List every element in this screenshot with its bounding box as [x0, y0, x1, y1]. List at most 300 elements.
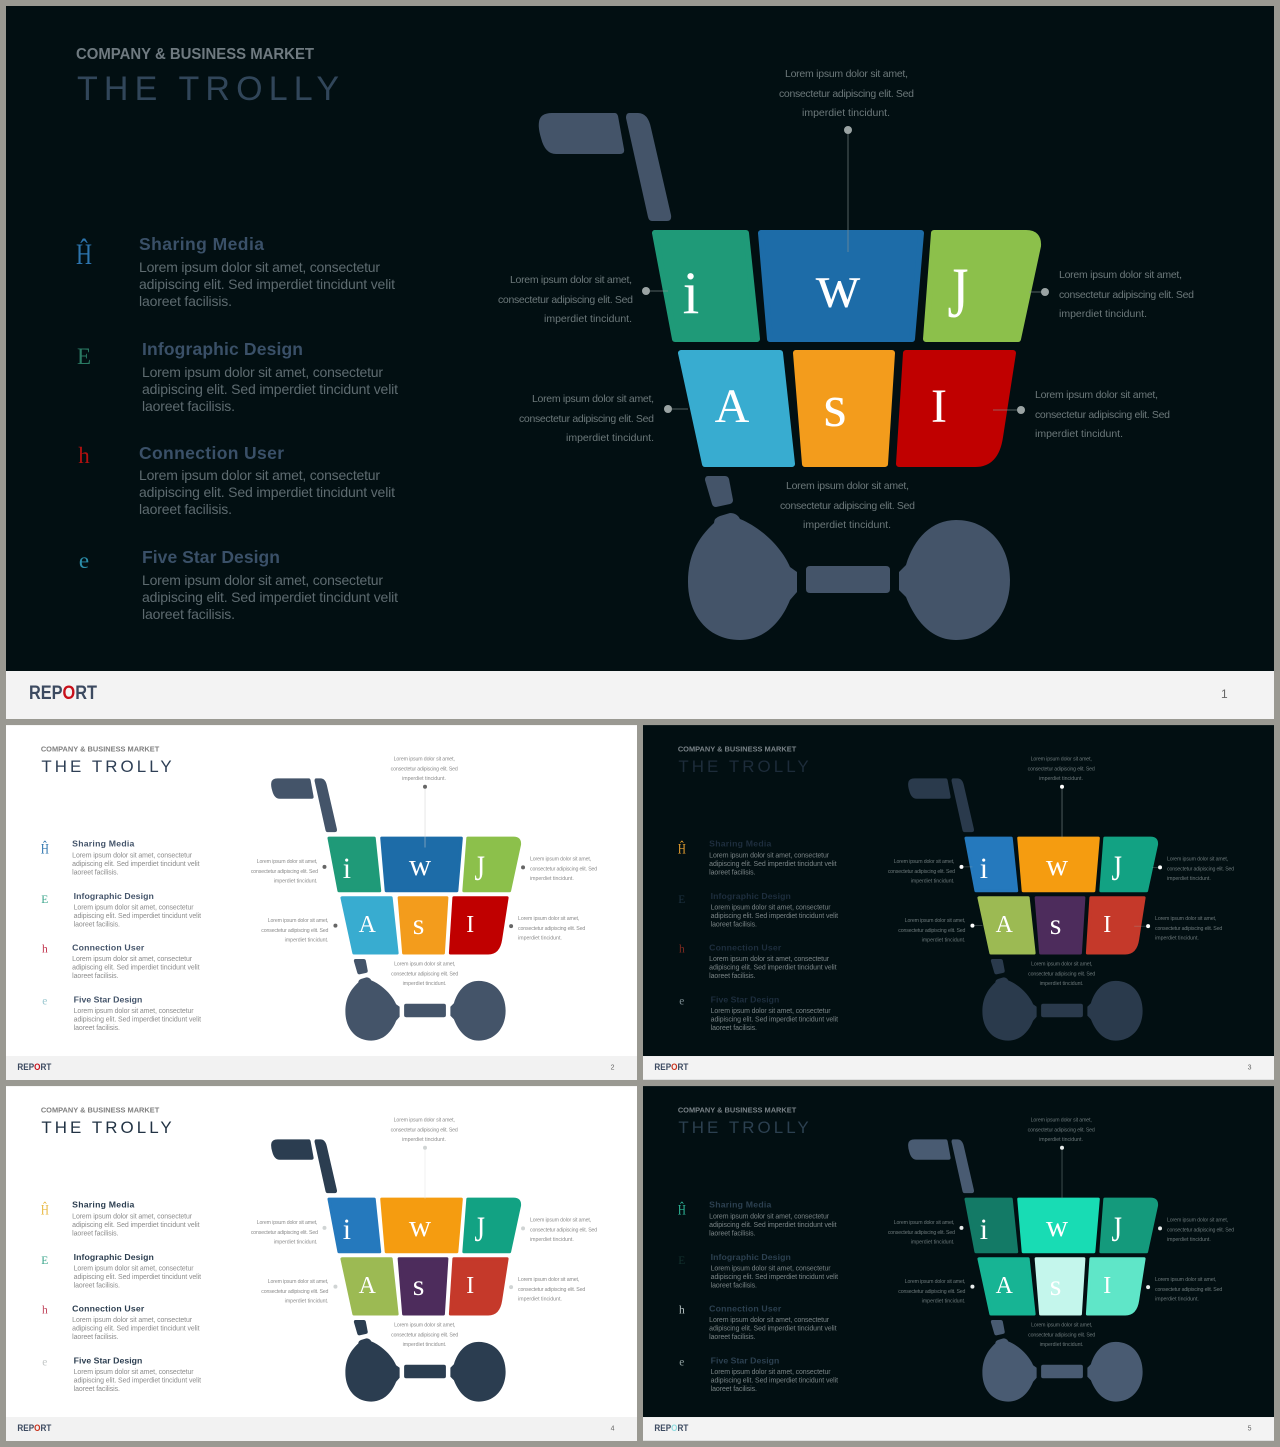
callout left lower: Lorem ipsum dolor sit amet, [905, 918, 965, 924]
callout left upper: imperdiet tincidunt. [274, 878, 318, 884]
callout right upper: Lorem ipsum dolor sit amet, [530, 856, 591, 862]
list item: Infographic Design [678, 891, 838, 929]
list item: Five Star Design [42, 1355, 201, 1393]
callout right lower: consectetur adipiscing elit. Sed [1035, 409, 1170, 421]
list item: Sharing Media: Lorem ipsum dolor sit amet, consectetur [72, 1213, 193, 1220]
callout right lower: Lorem ipsum dolor sit amet, [518, 916, 579, 922]
list item: Connection User: laoreet facilisis. [709, 1334, 756, 1341]
block i: i [343, 852, 351, 885]
callout left upper [888, 1220, 963, 1245]
block s [1036, 898, 1084, 953]
list item: Infographic Design: Infographic Design [74, 891, 154, 901]
list item: Connection User: Connection User [72, 943, 145, 953]
list item: Sharing Media: adipiscing elit. Sed imperdiet tincidunt velit [72, 1222, 200, 1229]
list item: Connection User: Lorem ipsum dolor sit amet, consectetur [139, 467, 380, 483]
list item: Connection User: adipiscing elit. Sed imperdiet tincidunt velit [139, 484, 395, 500]
callout top [1028, 756, 1095, 838]
callout left lower: imperdiet tincidunt. [922, 938, 965, 944]
callout right upper [1158, 1217, 1234, 1243]
block A [342, 1259, 397, 1314]
block w [761, 233, 921, 339]
list item: Sharing Media: adipiscing elit. Sed imperdiet tincidunt velit [139, 276, 395, 292]
block w [382, 1199, 461, 1252]
heading: slide 1 title [76, 46, 339, 108]
list item: Connection User: Lorem ipsum dolor sit amet, consectetur [72, 1317, 193, 1324]
list item: Connection User: laoreet facilisis. [72, 973, 119, 980]
block s [796, 353, 892, 464]
block J [1101, 1199, 1157, 1252]
callout right lower [509, 1277, 585, 1303]
list item: Connection User: Connection User [709, 943, 782, 953]
footer bar: 3 [1248, 1064, 1252, 1071]
heading: slide 1 title: THE TROLLY [77, 70, 339, 108]
list item: Infographic Design [678, 1252, 838, 1290]
list item: Infographic Design: E [678, 894, 685, 906]
block i: i [343, 1213, 351, 1246]
list item: Sharing Media: laoreet facilisis. [72, 1230, 119, 1237]
footer bar: 1 [1221, 687, 1228, 701]
list item: Five Star Design: Lorem ipsum dolor sit amet, consectetur [74, 1369, 194, 1376]
list item: Five Star Design: e [679, 1357, 684, 1369]
callout left lower [898, 1279, 974, 1305]
list item: Sharing Media: adipiscing elit. Sed imperdiet tincidunt velit [72, 861, 200, 868]
list item: Infographic Design: adipiscing elit. Sed imperdiet tincidunt velit [711, 913, 838, 920]
list item: Five Star Design [679, 994, 838, 1032]
callout top: imperdiet tincidunt. [1039, 776, 1083, 782]
list item: Sharing Media: adipiscing elit. Sed imperdiet tincidunt velit [709, 861, 837, 868]
list item: Sharing Media: Lorem ipsum dolor sit amet, consectetur [72, 852, 193, 859]
list item: Infographic Design: Infographic Design [711, 891, 791, 901]
list item: Connection User: adipiscing elit. Sed imperdiet tincidunt velit [72, 1325, 200, 1332]
callout left lower: Lorem ipsum dolor sit amet, [268, 1279, 328, 1285]
list item: Connection User: laoreet facilisis. [709, 973, 756, 980]
footer bar: REPORT [17, 1062, 51, 1073]
list item: Sharing Media: Sharing Media [709, 1200, 772, 1210]
list item: Five Star Design: e [42, 1357, 47, 1369]
callout right upper: consectetur adipiscing elit. Sed [1059, 289, 1194, 301]
callout left lower [261, 1279, 337, 1305]
block w: w [409, 848, 432, 882]
block w: w [409, 1209, 432, 1243]
list item: Infographic Design: Infographic Design [74, 1252, 154, 1262]
block I: I [931, 380, 947, 433]
list item: Connection User: h [679, 1305, 685, 1317]
callout left lower: Lorem ipsum dolor sit amet, [905, 1279, 965, 1285]
list item: Infographic Design: E [678, 1255, 685, 1267]
block I [1087, 1259, 1144, 1314]
list item: Infographic Design: Lorem ipsum dolor sit amet, consectetur [142, 364, 383, 380]
callout right upper: imperdiet tincidunt. [530, 876, 574, 882]
callout left upper: Lorem ipsum dolor sit amet, [257, 859, 318, 865]
callout top: imperdiet tincidunt. [802, 107, 890, 119]
block s: s [413, 908, 424, 941]
callout right upper: consectetur adipiscing elit. Sed [1167, 1227, 1234, 1233]
callout right upper: consectetur adipiscing elit. Sed [1167, 866, 1234, 872]
block w: w [816, 253, 861, 321]
list item: Connection User [679, 1304, 837, 1341]
list item: Connection User [42, 1304, 200, 1341]
block I [899, 353, 1013, 464]
block i [655, 233, 757, 339]
panel: slide 3 dark [643, 725, 1274, 1080]
callout left upper: imperdiet tincidunt. [544, 313, 632, 325]
callout bottom: imperdiet tincidunt. [803, 519, 891, 531]
list item: Sharing Media: Ĥ [41, 1201, 49, 1218]
cart frame and wheels [908, 778, 1143, 1041]
callout bottom: consectetur adipiscing elit. Sed [1028, 1332, 1095, 1338]
callout right lower: Lorem ipsum dolor sit amet, [1155, 1277, 1216, 1283]
callout top: consectetur adipiscing elit. Sed [779, 88, 914, 100]
heading: slide 3 title [678, 744, 809, 776]
list item: Five Star Design: Five Star Design [74, 1355, 142, 1365]
callout left upper: imperdiet tincidunt. [911, 1239, 955, 1245]
callout bottom [1028, 1322, 1095, 1348]
callout top: imperdiet tincidunt. [1039, 1137, 1083, 1143]
list item: Sharing Media: Sharing Media [709, 839, 772, 849]
list item: Five Star Design: Five Star Design [711, 994, 779, 1004]
list item: Sharing Media: Sharing Media [139, 234, 264, 254]
footer bar [6, 671, 1274, 719]
block A: A [359, 1273, 377, 1299]
callout left lower: consectetur adipiscing elit. Sed [898, 1289, 966, 1295]
list item: Sharing Media [41, 1200, 200, 1237]
footer bar [6, 1417, 637, 1441]
list item: Infographic Design: adipiscing elit. Sed imperdiet tincidunt velit [74, 913, 201, 920]
list item: Infographic Design: laoreet facilisis. [711, 1283, 757, 1290]
callout right lower: Lorem ipsum dolor sit amet, [518, 1277, 579, 1283]
callout left lower: imperdiet tincidunt. [922, 1299, 965, 1305]
callout top: Lorem ipsum dolor sit amet, [1031, 1117, 1092, 1123]
callout left upper [498, 274, 668, 325]
callout right lower [993, 389, 1170, 440]
callout left lower: imperdiet tincidunt. [285, 1299, 328, 1305]
callout right upper: Lorem ipsum dolor sit amet, [1059, 269, 1182, 281]
callout top: consectetur adipiscing elit. Sed [391, 766, 458, 772]
block i [329, 1199, 380, 1252]
callout left lower: imperdiet tincidunt. [285, 938, 328, 944]
callout bottom: consectetur adipiscing elit. Sed [1028, 971, 1095, 977]
block A [979, 1259, 1034, 1314]
list item: Infographic Design: laoreet facilisis. [74, 922, 120, 929]
list item: Sharing Media: Ĥ [678, 1201, 686, 1218]
callout left upper: consectetur adipiscing elit. Sed [888, 1230, 955, 1236]
heading: slide 2 title: THE TROLLY [41, 757, 172, 776]
list item: Infographic Design: laoreet facilisis. [142, 398, 235, 414]
block A [342, 898, 397, 953]
list item: Sharing Media: Lorem ipsum dolor sit amet, consectetur [709, 1213, 830, 1220]
block i [966, 838, 1017, 891]
list item: Sharing Media: Ĥ [76, 238, 92, 271]
callout left lower: imperdiet tincidunt. [566, 432, 654, 444]
callout right upper [521, 1217, 597, 1243]
list item: Sharing Media [41, 839, 200, 876]
callout top: imperdiet tincidunt. [402, 776, 446, 782]
list item: Connection User [78, 443, 395, 517]
list item: Sharing Media: Sharing Media [72, 839, 135, 849]
list item: Five Star Design: laoreet facilisis. [74, 1386, 120, 1393]
callout right upper: consectetur adipiscing elit. Sed [530, 866, 597, 872]
block I: I [1103, 912, 1111, 938]
callout right lower [509, 916, 585, 942]
footer bar: 5 [1248, 1425, 1252, 1432]
footer bar: REPORT [654, 1062, 688, 1073]
block s [1036, 1259, 1084, 1314]
callout top: consectetur adipiscing elit. Sed [391, 1127, 458, 1133]
block J [464, 1199, 520, 1252]
list item: Five Star Design: adipiscing elit. Sed imperdiet tincidunt velit [74, 1017, 201, 1024]
callout bottom: consectetur adipiscing elit. Sed [780, 500, 915, 512]
block A [979, 898, 1034, 953]
callout bottom: Lorem ipsum dolor sit amet, [394, 961, 455, 967]
list item: Five Star Design: Five Star Design [142, 547, 280, 567]
footer bar [6, 1056, 637, 1080]
callout left lower [519, 393, 688, 444]
callout right lower: consectetur adipiscing elit. Sed [1155, 926, 1222, 932]
list item: Connection User: adipiscing elit. Sed imperdiet tincidunt velit [709, 964, 837, 971]
list item: Five Star Design: e [679, 996, 684, 1008]
block I: I [466, 912, 474, 938]
callout top [391, 756, 458, 848]
list item: Infographic Design [41, 891, 201, 929]
block I [1087, 898, 1144, 953]
block s [399, 1259, 447, 1314]
list item: Five Star Design: Five Star Design [711, 1355, 779, 1365]
footer bar: 4 [611, 1425, 615, 1432]
list item: Infographic Design [77, 339, 398, 414]
block J: J [475, 1209, 485, 1249]
panel: slide 2 light [6, 725, 637, 1080]
block J [1101, 838, 1157, 891]
callout right lower: Lorem ipsum dolor sit amet, [1035, 389, 1158, 401]
callout bottom [391, 961, 458, 987]
panel: slide 1 dark main [6, 6, 1274, 719]
block J: J [1112, 1209, 1122, 1249]
block I [450, 1259, 507, 1314]
block i: i [683, 260, 699, 326]
block A: A [359, 912, 377, 938]
heading: slide 3 title: THE TROLLY [678, 757, 809, 776]
list item: Five Star Design: Lorem ipsum dolor sit amet, consectetur [711, 1008, 831, 1015]
callout top: consectetur adipiscing elit. Sed [1028, 1127, 1095, 1133]
callout left upper: consectetur adipiscing elit. Sed [888, 869, 955, 875]
block J: J [948, 253, 968, 333]
list item: Infographic Design: E [41, 1255, 48, 1267]
callout left lower: Lorem ipsum dolor sit amet, [532, 393, 654, 405]
callout right upper: imperdiet tincidunt. [1059, 308, 1147, 320]
callout left lower: consectetur adipiscing elit. Sed [898, 928, 966, 934]
block s: s [823, 373, 847, 439]
block A [681, 353, 792, 464]
block i: i [980, 1213, 988, 1246]
panel: slide 5 dark teal [643, 1086, 1274, 1441]
list item: Connection User: Connection User [139, 443, 284, 463]
list item: Sharing Media: laoreet facilisis. [72, 869, 119, 876]
block A: A [715, 380, 750, 433]
callout left lower: consectetur adipiscing elit. Sed [261, 1289, 329, 1295]
callout left lower: consectetur adipiscing elit. Sed [519, 413, 654, 425]
callout left upper: consectetur adipiscing elit. Sed [251, 1230, 318, 1236]
block w: w [1046, 1209, 1069, 1243]
block I: I [1103, 1273, 1111, 1299]
heading: slide 3 title: COMPANY & BUSINESS MARKET [678, 744, 797, 753]
list item: Five Star Design: Five Star Design [74, 994, 142, 1004]
block J: J [1112, 848, 1122, 888]
callout left lower: Lorem ipsum dolor sit amet, [268, 918, 328, 924]
callout top: Lorem ipsum dolor sit amet, [394, 756, 455, 762]
callout left lower [898, 918, 982, 944]
callout left upper [251, 859, 326, 884]
block J [926, 233, 1038, 339]
callout left upper [251, 1220, 326, 1245]
list item: Infographic Design: Lorem ipsum dolor sit amet, consectetur [711, 905, 831, 912]
callout left upper: consectetur adipiscing elit. Sed [251, 869, 318, 875]
cart frame and wheels [271, 778, 506, 1041]
heading: slide 5 title [678, 1105, 809, 1137]
list item: Five Star Design: laoreet facilisis. [142, 606, 235, 622]
list item: Connection User: h [42, 944, 48, 956]
list item: Infographic Design: adipiscing elit. Sed imperdiet tincidunt velit [74, 1274, 201, 1281]
list item: Connection User: laoreet facilisis. [72, 1334, 119, 1341]
list item: Connection User: Connection User [72, 1304, 145, 1314]
callout bottom: Lorem ipsum dolor sit amet, [786, 480, 909, 492]
cart frame and wheels [271, 1139, 506, 1402]
callout bottom: consectetur adipiscing elit. Sed [391, 1332, 458, 1338]
callout left upper: Lorem ipsum dolor sit amet, [257, 1220, 318, 1226]
callout top: imperdiet tincidunt. [402, 1137, 446, 1143]
callout bottom: consectetur adipiscing elit. Sed [391, 971, 458, 977]
callout right upper [521, 856, 597, 882]
list item: Five Star Design: adipiscing elit. Sed imperdiet tincidunt velit [142, 589, 398, 605]
list item: Connection User [42, 943, 200, 980]
callout bottom [1028, 961, 1095, 987]
list item: Infographic Design: Infographic Design [711, 1252, 791, 1262]
callout left upper: imperdiet tincidunt. [911, 878, 955, 884]
callout left upper: Lorem ipsum dolor sit amet, [894, 1220, 955, 1226]
list item: Connection User: h [679, 944, 685, 956]
callout right lower: imperdiet tincidunt. [1155, 1297, 1199, 1303]
callout right lower: consectetur adipiscing elit. Sed [1155, 1287, 1222, 1293]
list item: Five Star Design [679, 1355, 838, 1393]
list item: Five Star Design [79, 547, 398, 622]
list item: Five Star Design: laoreet facilisis. [711, 1025, 757, 1032]
block s [399, 898, 447, 953]
callout top: Lorem ipsum dolor sit amet, [394, 1117, 455, 1123]
list item: Sharing Media [76, 234, 395, 309]
list item: Five Star Design: adipiscing elit. Sed imperdiet tincidunt velit [74, 1378, 201, 1385]
callout left upper: consectetur adipiscing elit. Sed [498, 294, 633, 306]
list item: Connection User: adipiscing elit. Sed imperdiet tincidunt velit [72, 964, 200, 971]
callout bottom [391, 1322, 458, 1348]
callout right lower: imperdiet tincidunt. [1035, 428, 1123, 440]
callout right lower: consectetur adipiscing elit. Sed [518, 926, 585, 932]
list item: Infographic Design: laoreet facilisis. [711, 922, 757, 929]
callout bottom: imperdiet tincidunt. [1040, 981, 1083, 987]
list item: Five Star Design: laoreet facilisis. [711, 1386, 757, 1393]
block J [464, 838, 520, 891]
callout right upper: consectetur adipiscing elit. Sed [530, 1227, 597, 1233]
heading: slide 5 title: THE TROLLY [678, 1118, 809, 1137]
list item: Sharing Media: Lorem ipsum dolor sit amet, consectetur [139, 259, 380, 275]
block s: s [413, 1269, 424, 1302]
list item: Connection User [679, 943, 837, 980]
callout right upper: imperdiet tincidunt. [1167, 876, 1211, 882]
callout top [391, 1117, 458, 1199]
block i [329, 838, 380, 891]
callout right upper: imperdiet tincidunt. [1167, 1237, 1211, 1243]
list item: Infographic Design: laoreet facilisis. [74, 1283, 120, 1290]
callout right upper: Lorem ipsum dolor sit amet, [530, 1217, 591, 1223]
list item: Sharing Media: laoreet facilisis. [709, 869, 756, 876]
callout right lower: imperdiet tincidunt. [1155, 936, 1199, 942]
callout top: Lorem ipsum dolor sit amet, [785, 68, 908, 80]
list item: Five Star Design: Lorem ipsum dolor sit amet, consectetur [142, 572, 383, 588]
heading: slide 2 title: COMPANY & BUSINESS MARKET [41, 744, 160, 753]
list item: Infographic Design: adipiscing elit. Sed imperdiet tincidunt velit [711, 1274, 838, 1281]
block w [382, 838, 461, 891]
list item: Sharing Media: laoreet facilisis. [139, 293, 232, 309]
list item: Connection User: adipiscing elit. Sed imperdiet tincidunt velit [709, 1325, 837, 1332]
list item: Sharing Media: Lorem ipsum dolor sit amet, consectetur [709, 852, 830, 859]
list item: Connection User: h [78, 443, 90, 468]
list item: Connection User: h [42, 1305, 48, 1317]
heading: slide 2 title [41, 744, 172, 776]
callout left lower: consectetur adipiscing elit. Sed [261, 928, 329, 934]
callout right upper [1152, 856, 1234, 882]
callout left upper: Lorem ipsum dolor sit amet, [510, 274, 632, 286]
footer bar [643, 1417, 1274, 1441]
list item: Sharing Media: Ĥ [41, 840, 49, 857]
list item: Sharing Media [678, 1200, 837, 1237]
list item: Five Star Design: adipiscing elit. Sed imperdiet tincidunt velit [711, 1017, 838, 1024]
block w [1019, 838, 1098, 891]
list item: Sharing Media: adipiscing elit. Sed imperdiet tincidunt velit [709, 1222, 837, 1229]
list item: Five Star Design: Lorem ipsum dolor sit amet, consectetur [711, 1369, 831, 1376]
callout right lower [1146, 1277, 1222, 1303]
callout bottom: Lorem ipsum dolor sit amet, [394, 1322, 455, 1328]
list item: Five Star Design [42, 994, 201, 1032]
footer bar: 2 [611, 1064, 615, 1071]
heading: slide 4 title: COMPANY & BUSINESS MARKET [41, 1105, 160, 1114]
list item: Connection User: laoreet facilisis. [139, 501, 232, 517]
list item: Infographic Design: adipiscing elit. Sed imperdiet tincidunt velit [142, 381, 398, 397]
cart frame and wheels [539, 113, 1010, 640]
callout left upper [888, 859, 972, 884]
list item: Connection User: Lorem ipsum dolor sit amet, consectetur [72, 956, 193, 963]
list item: Infographic Design: E [41, 894, 48, 906]
block J: J [475, 848, 485, 888]
list item: Sharing Media: Sharing Media [72, 1200, 135, 1210]
block w [1019, 1199, 1098, 1252]
block i: i [980, 852, 988, 885]
callout bottom: Lorem ipsum dolor sit amet, [1031, 1322, 1092, 1328]
callout right upper: Lorem ipsum dolor sit amet, [1167, 1217, 1228, 1223]
callout left lower [261, 918, 337, 944]
list item: Infographic Design: Lorem ipsum dolor sit amet, consectetur [74, 905, 194, 912]
callout bottom: imperdiet tincidunt. [1040, 1342, 1083, 1348]
callout right lower: imperdiet tincidunt. [518, 1297, 562, 1303]
list item: Connection User: Lorem ipsum dolor sit amet, consectetur [709, 956, 830, 963]
list item: Infographic Design: Infographic Design [142, 339, 303, 359]
block I: I [466, 1273, 474, 1299]
block s: s [1050, 908, 1061, 941]
heading: slide 4 title [41, 1105, 172, 1137]
callout top: Lorem ipsum dolor sit amet, [1031, 756, 1092, 762]
cart frame and wheels [908, 1139, 1143, 1402]
list item: Five Star Design: Lorem ipsum dolor sit amet, consectetur [74, 1008, 194, 1015]
footer bar [643, 1056, 1274, 1080]
callout left upper: Lorem ipsum dolor sit amet, [894, 859, 955, 865]
callout right upper: Lorem ipsum dolor sit amet, [1167, 856, 1228, 862]
